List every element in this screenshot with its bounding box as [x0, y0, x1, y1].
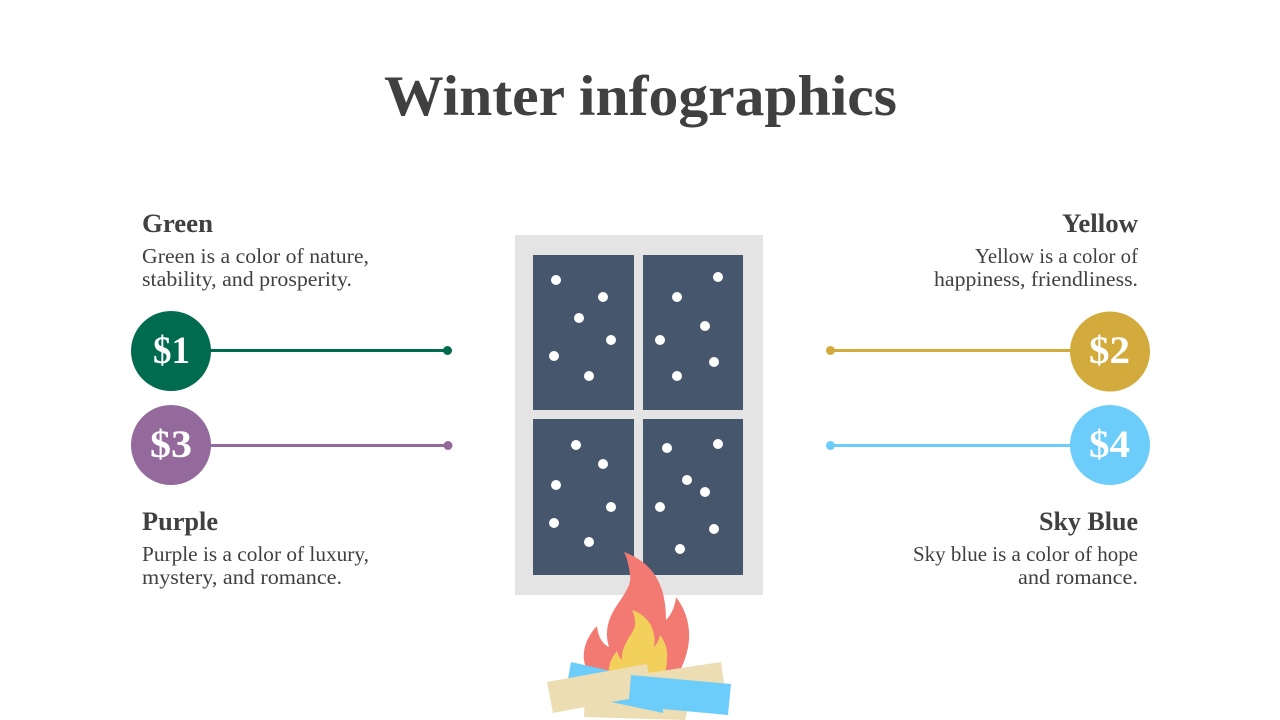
text block: green: Green is a color of nature,: [142, 244, 369, 268]
text block: sky blue: [913, 542, 1138, 589]
text block: purple: mystery, and romance.: [142, 565, 342, 589]
badge: $4: $4: [1089, 423, 1130, 466]
connector: yellow: [826, 346, 1075, 355]
panel: purple: [131, 405, 452, 589]
text block: purple: [142, 542, 369, 589]
panel: yellow: [826, 209, 1150, 392]
badge: $1: $1: [153, 329, 190, 372]
badge: $4: [1070, 405, 1150, 485]
text block: green: [142, 244, 369, 291]
badge: $3: $3: [150, 423, 192, 466]
text block: yellow: happiness, friendliness.: [934, 267, 1138, 291]
badge: $2: [1070, 312, 1150, 392]
text block: sky blue: and romance.: [1018, 565, 1138, 589]
text block: green: stability, and prosperity.: [142, 267, 352, 291]
heading: purple: Purple: [142, 507, 218, 536]
icon: campfire: [547, 552, 731, 720]
panel: sky blue: [826, 405, 1150, 589]
heading: green: Green: [142, 209, 214, 238]
badge: $1: [131, 311, 211, 391]
text block: purple: Purple is a color of luxury,: [142, 542, 369, 566]
text block: yellow: Yellow is a color of: [975, 244, 1138, 268]
connector: sky blue: [826, 441, 1075, 450]
panel: green: [131, 209, 452, 391]
text block: yellow: [934, 244, 1138, 291]
connector: green: [205, 346, 452, 355]
connector: purple: [205, 441, 452, 450]
heading: yellow: Yellow: [1062, 209, 1138, 238]
icon: window with snow: [515, 235, 763, 595]
title: Winter infographics: [384, 65, 897, 128]
badge: $2: $2: [1089, 329, 1130, 372]
text block: sky blue: Sky blue is a color of hope: [913, 542, 1138, 566]
heading: sky blue: Sky Blue: [1039, 507, 1138, 536]
badge: $3: [131, 405, 211, 485]
